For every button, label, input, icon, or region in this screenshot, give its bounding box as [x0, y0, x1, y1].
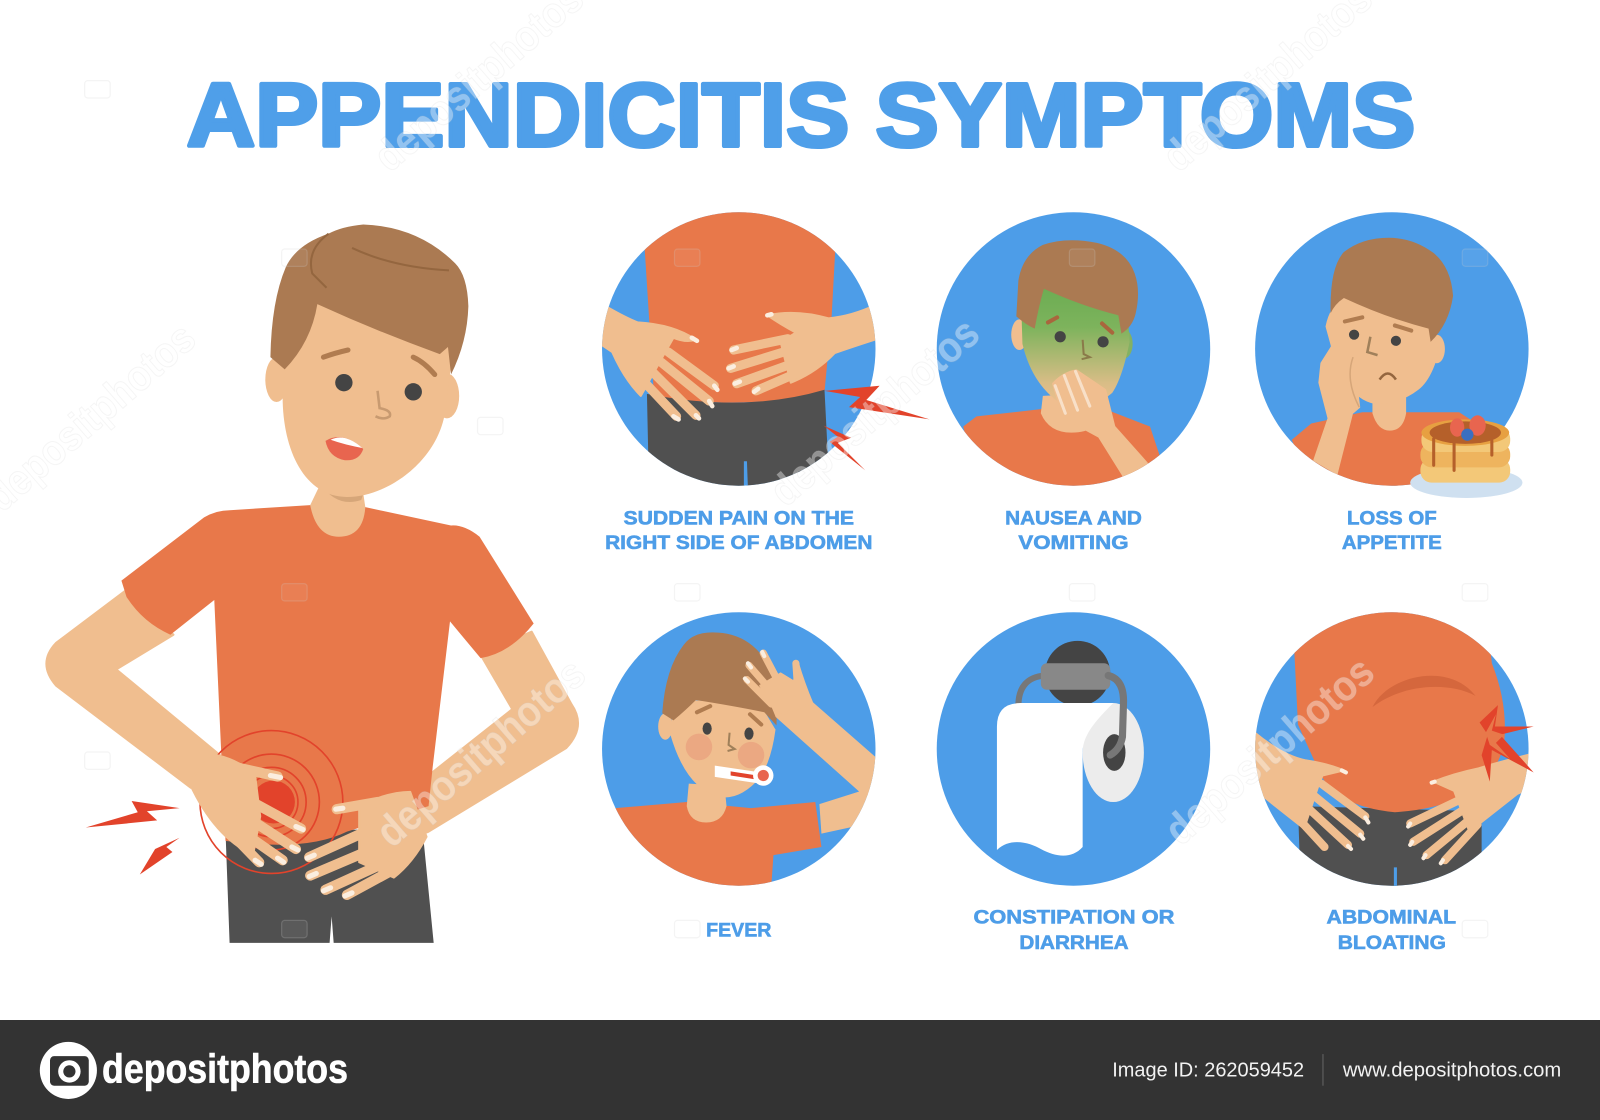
panel: fever — [602, 612, 878, 898]
watermark: diagonal text marks — [0, 0, 1384, 857]
circle background — [602, 212, 876, 486]
burst centre — [1486, 714, 1510, 759]
plate — [1410, 467, 1522, 498]
right arm — [403, 632, 578, 842]
logo wordmark: depositphotos — [102, 1046, 348, 1092]
eyebrows — [323, 350, 435, 374]
right hand — [307, 792, 427, 896]
clipped figure — [597, 204, 878, 490]
label: sudden pain: SUDDEN PAIN ON THE — [623, 507, 854, 529]
label: appetite: APPETITE — [1342, 532, 1442, 554]
nose — [376, 391, 390, 418]
label: vomiting: VOMITING — [1018, 532, 1129, 554]
main illustration: man holding abdomen — [46, 224, 578, 943]
t-shirt — [121, 505, 534, 845]
lightning marks — [823, 386, 930, 470]
label: constipation or: CONSTIPATION OR — [973, 906, 1174, 928]
label: nausea and: NAUSEA AND — [1005, 507, 1142, 529]
panel: loss of appetite — [1255, 212, 1529, 500]
holder bar — [1041, 663, 1110, 690]
dark bar — [0, 1020, 1600, 1120]
watermark: diagonal text marks: depositphotos — [367, 650, 595, 857]
wall mount — [1045, 641, 1110, 706]
neck shadow — [320, 484, 363, 502]
clipped figure — [963, 240, 1160, 500]
watermark: diagonal text marks: depositphotos — [1156, 648, 1384, 854]
label: fever: FEVER — [706, 920, 771, 942]
panel: sudden pain on the right side of abdomen — [597, 204, 930, 490]
pancake stack — [1420, 415, 1510, 483]
panel: constipation or diarrhea — [937, 612, 1210, 886]
image id: Image ID: 262059452 — [1112, 1060, 1304, 1082]
mouth — [326, 437, 363, 460]
toilet roll — [997, 703, 1144, 856]
trousers — [226, 829, 434, 943]
logo icon — [40, 1042, 97, 1099]
watermark: diagonal text marks: depositphotos — [761, 309, 989, 516]
clipped figure — [612, 632, 878, 898]
circle background — [602, 612, 876, 886]
pain lightning — [86, 801, 180, 874]
bloating burst — [1480, 705, 1534, 782]
holder arm back — [1018, 676, 1045, 706]
hair — [270, 224, 468, 374]
neck — [310, 480, 365, 537]
face — [283, 291, 454, 497]
watermark: small camera marks — [85, 81, 1488, 938]
label: diarrhea: DIARRHEA — [1019, 932, 1129, 954]
pain centre — [252, 781, 295, 823]
clipped figure — [1292, 238, 1470, 486]
label: right side of abdomen: RIGHT SIDE OF ABDOMEN — [605, 532, 872, 554]
label: abdominal: ABDOMINAL — [1327, 906, 1456, 928]
circle background — [1255, 212, 1529, 486]
circle background — [1255, 612, 1529, 886]
pain rings — [200, 731, 343, 873]
circle background — [937, 212, 1210, 486]
left arm — [46, 590, 222, 788]
left hand — [190, 755, 303, 864]
website: www.depositphotos.com — [1342, 1060, 1561, 1082]
ears — [265, 357, 288, 402]
panel: abdominal bloating — [1250, 602, 1536, 898]
footer band — [0, 1020, 1600, 1120]
title: APPENDICITIS SYMPTOMS — [187, 66, 1415, 166]
hair parting — [311, 234, 449, 288]
eyes — [335, 374, 353, 391]
label: loss of: LOSS OF — [1347, 507, 1437, 529]
panel: nausea and vomiting — [937, 212, 1210, 500]
clipped figure — [1255, 612, 1528, 886]
label: bloating: BLOATING — [1338, 932, 1446, 954]
divider — [1322, 1054, 1323, 1086]
circle background — [937, 612, 1210, 886]
holder arm front — [1108, 676, 1124, 755]
